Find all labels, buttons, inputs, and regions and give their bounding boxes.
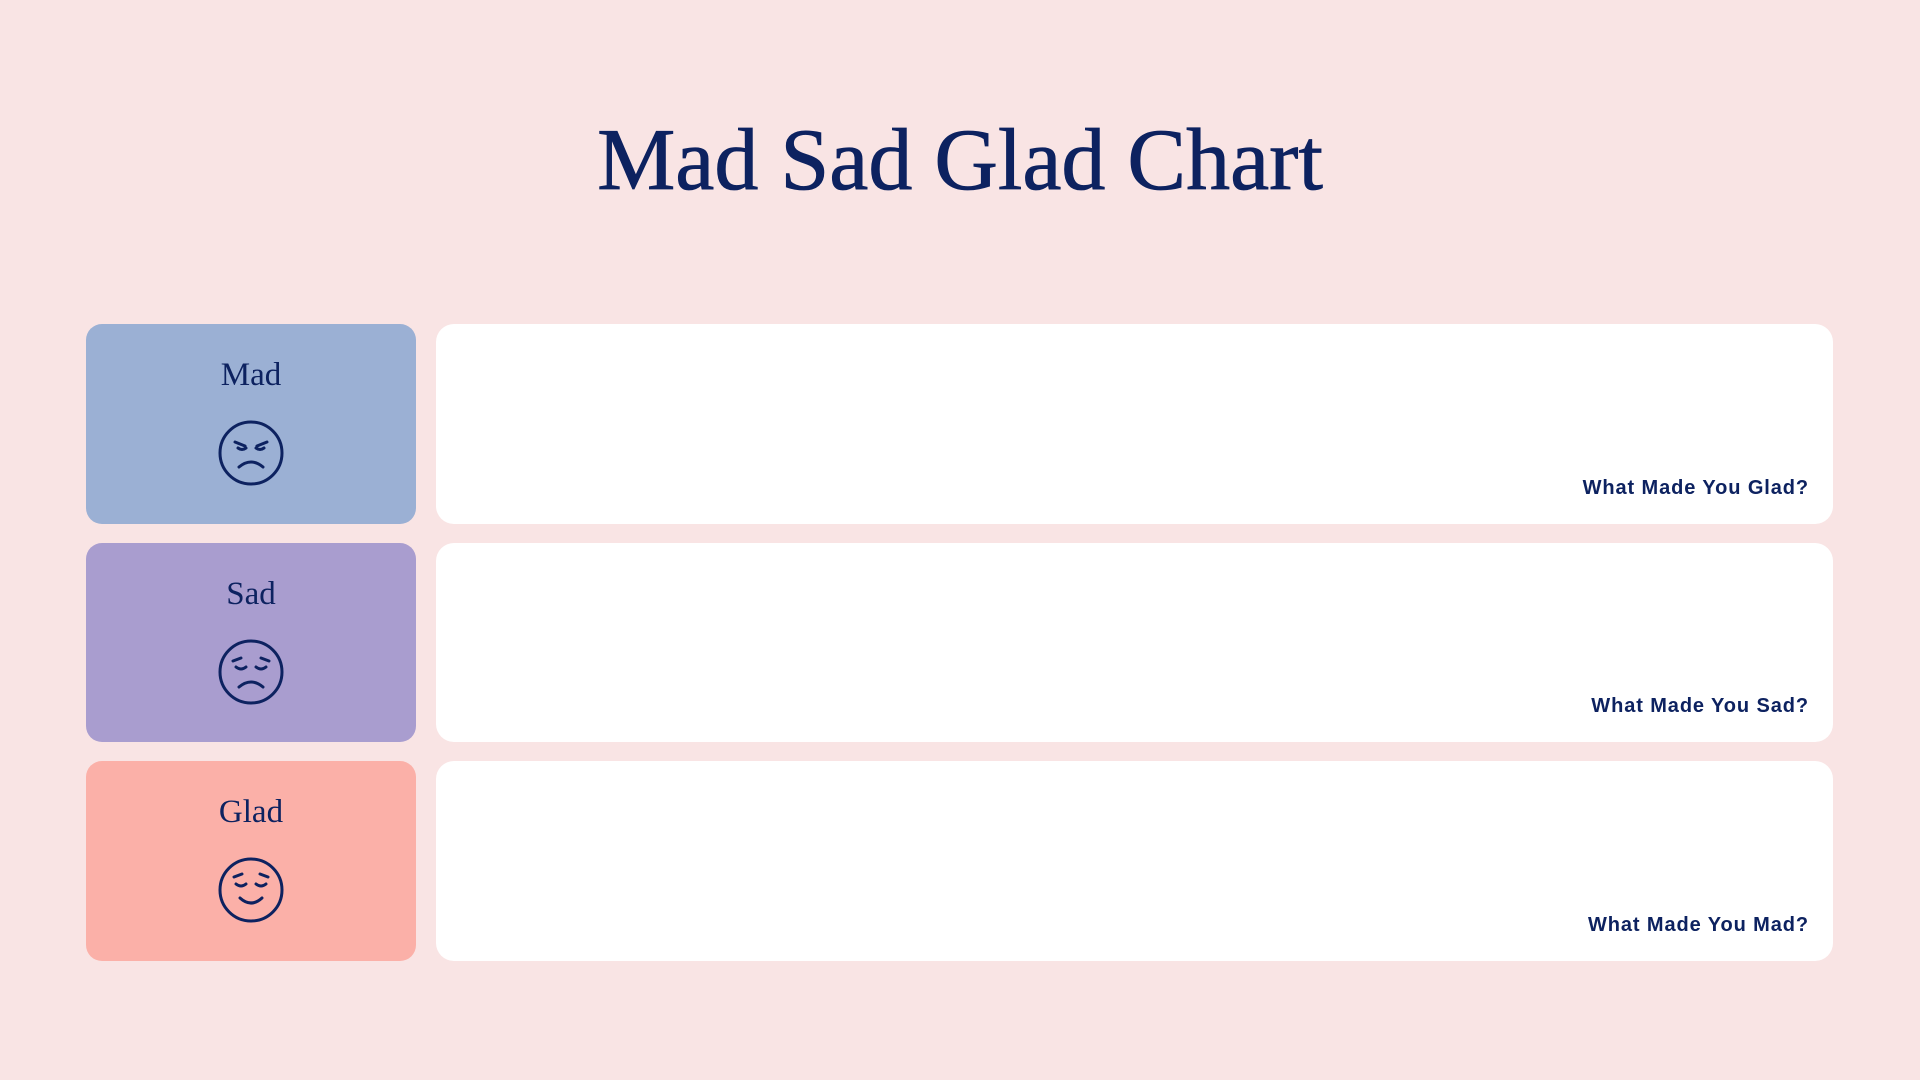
- panel: glad label: [86, 761, 416, 961]
- icon: sad face: [218, 640, 284, 704]
- icon: angry face: [218, 420, 284, 486]
- panel: sad label: [86, 543, 416, 742]
- panel: mad label: [86, 324, 416, 524]
- panel: mad answer: [436, 324, 1833, 524]
- panel: sad answer: [436, 543, 1833, 742]
- prompt: What Made You Sad?: [1591, 695, 1809, 717]
- heading: sad: Sad: [226, 576, 276, 612]
- heading: mad: Mad: [221, 357, 281, 393]
- icon: happy face: [218, 858, 284, 922]
- panel: glad answer: [436, 761, 1833, 961]
- prompt: What Made You Glad?: [1583, 477, 1809, 499]
- heading: glad: Glad: [219, 794, 283, 830]
- title: Mad Sad Glad Chart: [597, 112, 1323, 209]
- prompt: What Made You Mad?: [1588, 914, 1809, 936]
